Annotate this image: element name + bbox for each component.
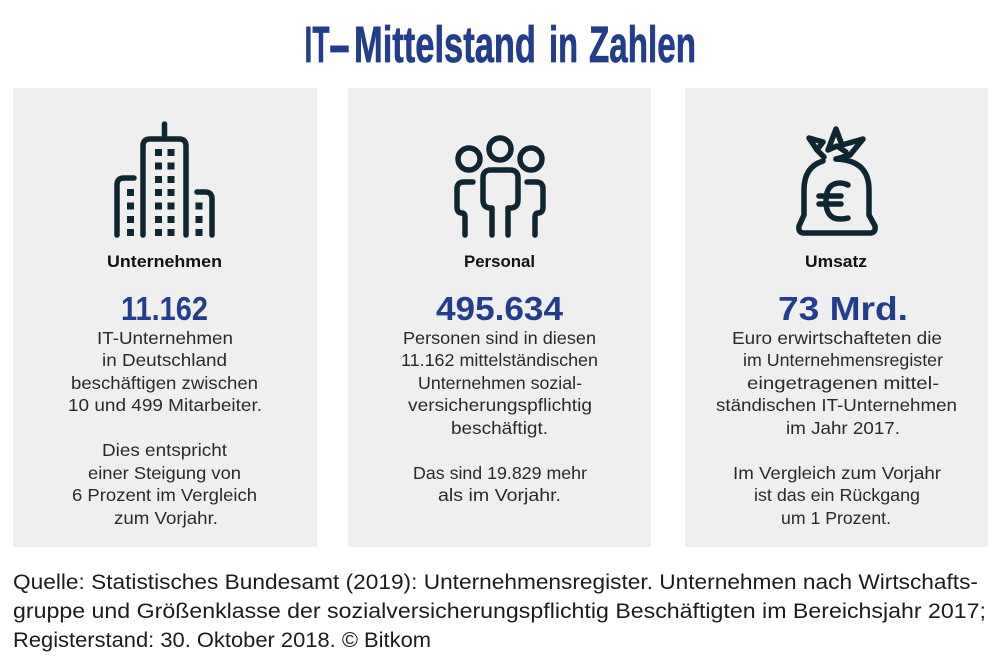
title: in — [549, 16, 578, 73]
panel: Personal — [348, 88, 651, 547]
title: - — [328, 16, 351, 73]
text block: Umsatz description: Im Vergleich zum Vorjahr — [733, 463, 941, 483]
text block: Personal description — [401, 328, 598, 505]
text block: Umsatz description: ständischen IT-Unternehmen — [716, 395, 957, 415]
icon: office buildings — [117, 124, 212, 236]
icon: group of people — [457, 138, 543, 235]
title: Zahlen — [589, 16, 696, 73]
heading: Umsatz: Umsatz — [805, 252, 867, 271]
text block: Unternehmen description: IT-Unternehmen — [97, 328, 233, 348]
heading: Unternehmen: Unternehmen — [107, 252, 222, 271]
text block: Umsatz description: Euro erwirtschafteten die — [732, 328, 942, 348]
text block: Umsatz description: ist das ein Rückgang — [754, 485, 920, 505]
text block: Personal description: als im Vorjahr. — [438, 485, 561, 505]
number: 495.634: 495.634 — [436, 290, 564, 327]
title: IT — [304, 16, 330, 73]
text block: Unternehmen description — [68, 328, 262, 528]
text block: Unternehmen description: in Deutschland — [102, 350, 227, 370]
text block: Personal description: Unternehmen sozial- — [418, 373, 582, 393]
text block: Personal description: beschäftigt. — [451, 418, 548, 438]
text block: Umsatz description — [716, 328, 957, 528]
text block: Unternehmen description: beschäftigen zwischen — [71, 373, 258, 393]
text block: Personal description: 11.162 mittelständischen — [401, 350, 598, 370]
number: 73 Mrd.: 73 Mrd. — [778, 290, 908, 327]
text block: Unternehmen description: Dies entspricht — [102, 440, 227, 460]
text block: Personal description: Das sind 19.829 mehr — [413, 463, 587, 483]
panel: Unternehmen — [13, 88, 317, 547]
text block: Unternehmen description: einer Steigung von — [88, 463, 241, 483]
text block: Unternehmen description: zum Vorjahr. — [114, 508, 218, 528]
text block: Unternehmen description: 10 und 499 Mitarbeiter. — [68, 395, 262, 415]
text block: Umsatz description: im Jahr 2017. — [786, 418, 900, 438]
source note: Quelle: Statistisches Bundesamt (2019): Unternehmensregister. Unternehmen nach Wirtschafts- — [13, 571, 978, 594]
text block: Umsatz description: eingetragenen mittel- — [747, 373, 939, 393]
source note: gruppe und Größenklasse der sozialversicherungspflichtig Beschäftigten im Bereichsjahr 2017; — [13, 600, 986, 623]
panel: Umsatz — [685, 88, 988, 547]
text block: Unternehmen description: 6 Prozent im Vergleich — [72, 485, 257, 505]
heading: Personal: Personal — [464, 252, 535, 271]
text block: Personal description: Personen sind in diesen — [403, 328, 596, 348]
number: 11.162: 11.162 — [121, 290, 208, 327]
title: Mittelstand — [354, 16, 536, 73]
icon: money bag with euro — [799, 129, 875, 233]
text block: Umsatz description: um 1 Prozent. — [781, 508, 891, 528]
text block: Umsatz description: im Unternehmensregister — [743, 350, 943, 370]
text block: Personal description: versicherungspflichtig — [408, 395, 592, 415]
source note: Registerstand: 30. Oktober 2018. © Bitkom — [13, 629, 431, 652]
source note — [13, 571, 986, 652]
